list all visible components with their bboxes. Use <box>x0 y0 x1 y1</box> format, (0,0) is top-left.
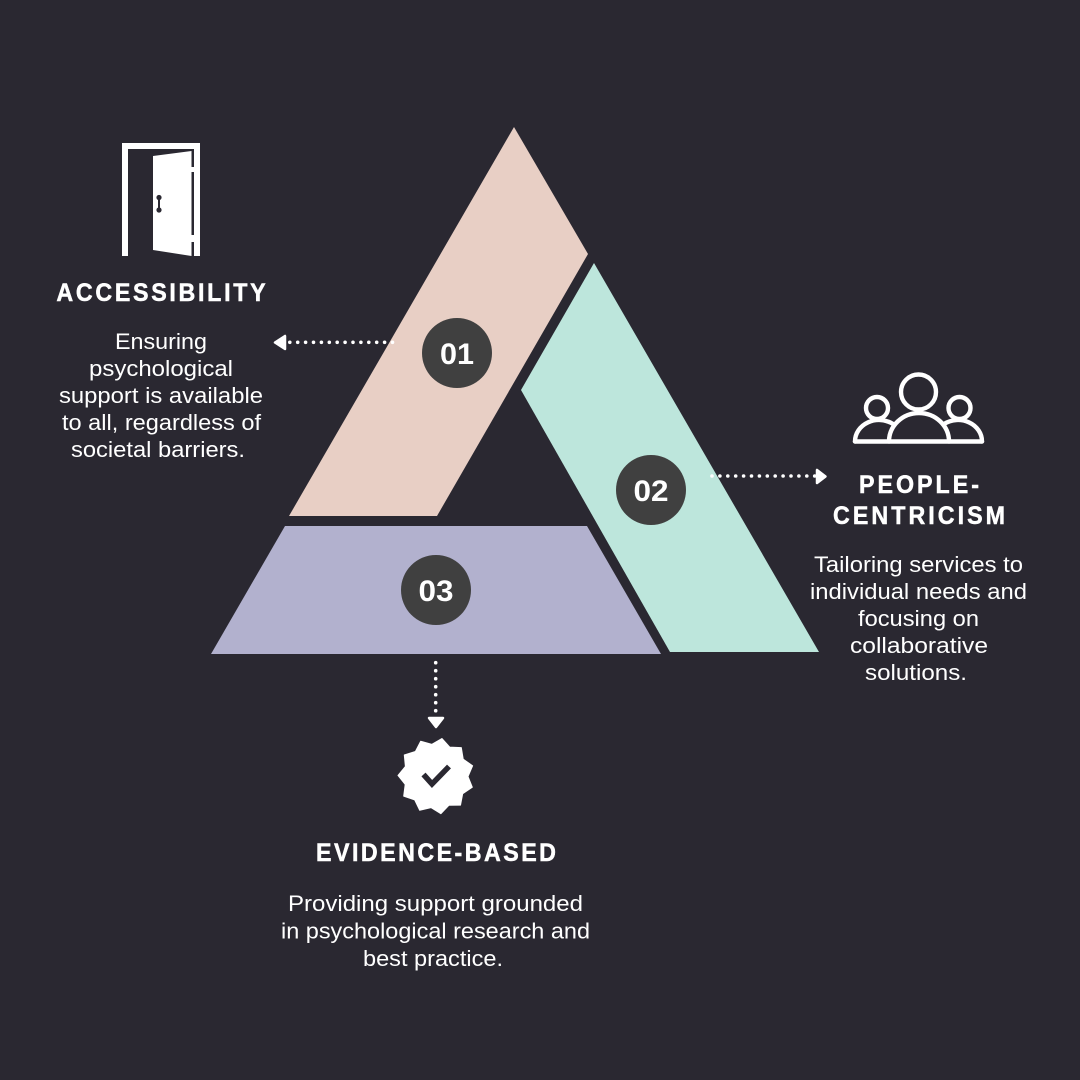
text block: people-centricism description: focusing on <box>858 606 979 631</box>
text block: people-centricism description: individual needs and <box>810 579 1027 604</box>
number badge 02: 02 <box>634 475 668 508</box>
segment 02: mint <box>521 263 819 652</box>
number badge 01: 01 <box>440 338 474 371</box>
segment 01: pink <box>289 127 588 516</box>
heading: people-centricism: CENTRICISM <box>833 502 1005 530</box>
text block: accessibility description: societal barriers. <box>71 437 245 462</box>
text block: evidence-based description: best practice. <box>363 946 503 971</box>
text block: evidence-based description: Providing support grounded <box>288 891 583 916</box>
text block: people-centricism description <box>810 552 1027 685</box>
text block: accessibility description <box>59 329 263 462</box>
arrow: to people-centricism <box>712 470 826 483</box>
heading: accessibility: ACCESSIBILITY <box>56 279 266 307</box>
icon: group of people <box>855 374 982 442</box>
number badge 02 <box>616 455 686 525</box>
text block: people-centricism description: Tailoring services to <box>814 552 1023 577</box>
icon: open door <box>122 143 200 256</box>
arrow: to accessibility <box>275 336 392 349</box>
triangle diagram <box>211 127 819 654</box>
number badge 03 <box>401 555 471 625</box>
text block: accessibility description: to all, regardless of <box>62 410 262 435</box>
text block: evidence-based description <box>281 891 590 971</box>
arrow: to evidence-based <box>429 663 443 727</box>
heading: people-centricism: PEOPLE- <box>859 471 979 499</box>
heading: people-centricism <box>833 471 1005 530</box>
heading: evidence-based: EVIDENCE-BASED <box>316 839 556 867</box>
text block: people-centricism description: solutions. <box>865 660 967 685</box>
number badge 03: 03 <box>418 575 454 608</box>
text block: accessibility description: support is available <box>59 383 263 408</box>
icon: verified badge <box>398 738 473 814</box>
text block: accessibility description: Ensuring <box>115 329 207 354</box>
number badge 01 <box>422 318 492 388</box>
text block: people-centricism description: collaborative <box>850 633 988 658</box>
segment 03: lavender <box>211 526 661 654</box>
text block: accessibility description: psychological <box>89 356 233 381</box>
text block: evidence-based description: in psychological research and <box>281 918 590 944</box>
